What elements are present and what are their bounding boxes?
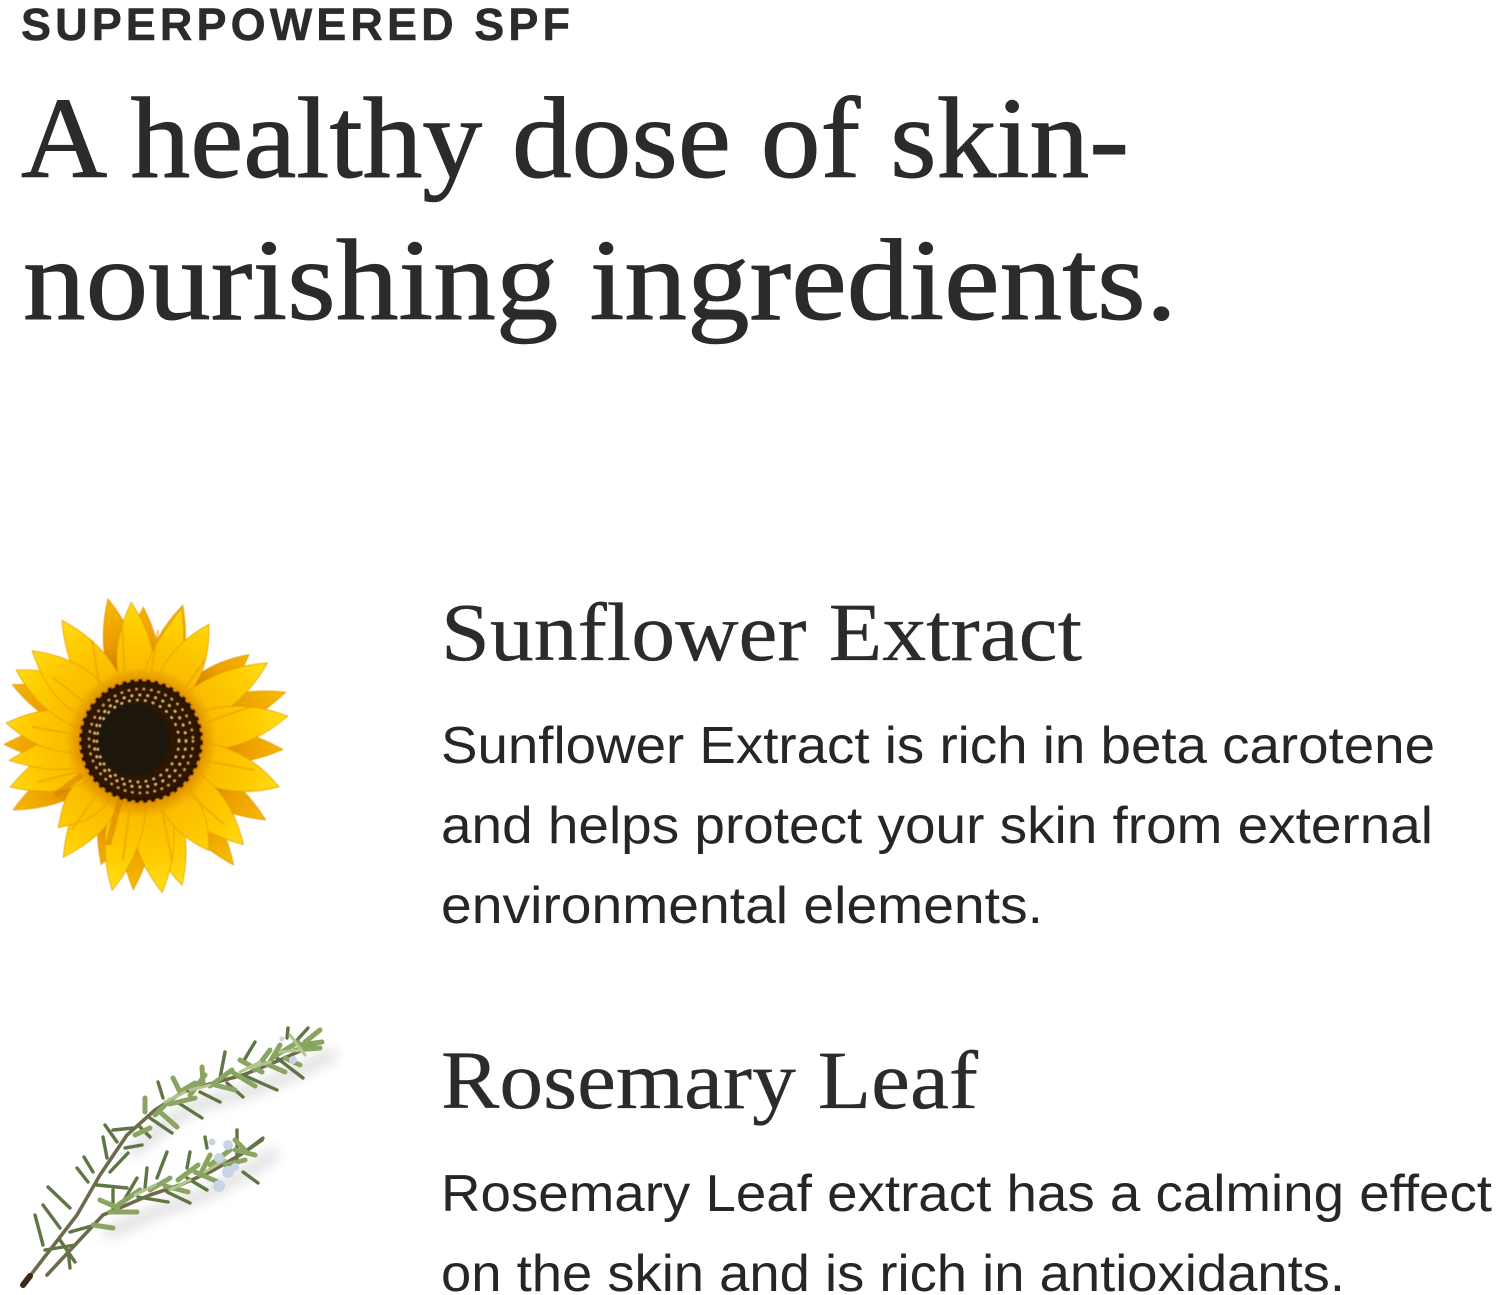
main heading: [21, 75, 1177, 345]
eyebrow label: SUPERPOWERED SPF: [21, 0, 570, 50]
text block: sunflower description: environmental elements.: [441, 877, 1043, 935]
heading: Rosemary Leaf: Rosemary Leaf: [441, 1034, 978, 1126]
text block: sunflower description: [441, 717, 1435, 935]
heading: Sunflower Extract: Sunflower Extract: [441, 586, 1082, 678]
sunflower petal streaks: [32, 625, 255, 860]
text block: rosemary description: [441, 1165, 1493, 1295]
icon: rosemary sprigs: [23, 1028, 330, 1285]
main heading: A healthy dose of skin-: [21, 75, 1129, 203]
icon: sunflower: [3, 595, 291, 895]
sunflower seed disk: [81, 681, 201, 801]
text block: sunflower description: and helps protect your skin from external: [441, 797, 1433, 855]
text block: rosemary description: Rosemary Leaf extract has a calming effect: [441, 1165, 1493, 1223]
main heading: nourishing ingredients.: [23, 217, 1177, 345]
text block: sunflower description: Sunflower Extract is rich in beta carotene: [441, 717, 1435, 775]
